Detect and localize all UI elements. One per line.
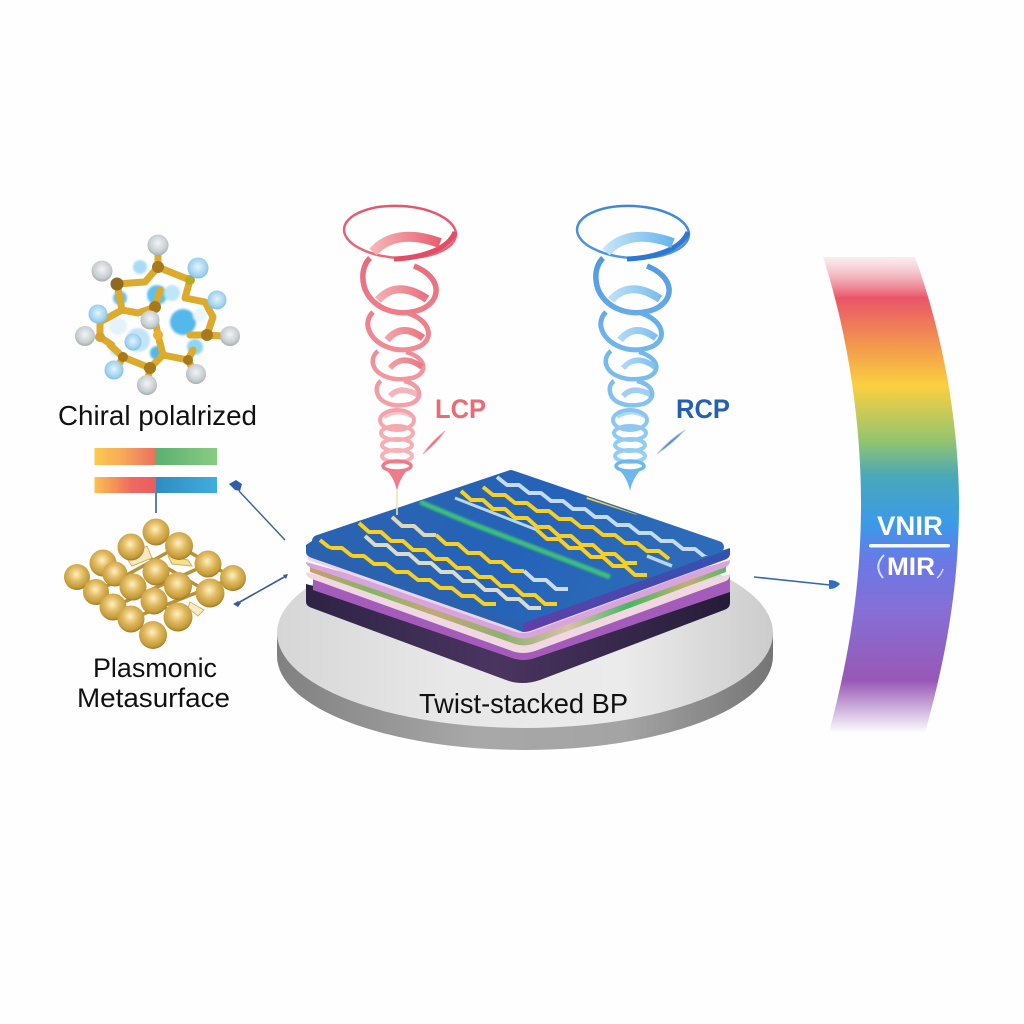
label: LCP: LCP	[435, 394, 486, 424]
label: Plasmonic Metasurface: Metasurface	[77, 683, 230, 713]
layer: rainbow film	[310, 562, 726, 646]
arrow: stack to bars	[229, 480, 285, 540]
molecule blue clusters	[109, 260, 207, 360]
disk top	[277, 538, 773, 728]
slab side left	[306, 541, 523, 632]
mixed wave yellow	[436, 535, 524, 571]
legend bar: bottom	[94, 477, 217, 493]
pointer: LCP tail	[423, 431, 445, 454]
green streak	[420, 502, 610, 577]
legend bar: top	[94, 448, 217, 465]
mixed wave white start	[392, 517, 436, 535]
layer: pale film	[308, 552, 728, 633]
label: Plasmonic Metasurface: Plasmonic	[93, 653, 217, 683]
molecule gold bonds	[100, 250, 222, 378]
connector: bar to metasurface	[155, 493, 157, 513]
yellow wave 4	[537, 530, 647, 575]
white wave 2	[497, 477, 717, 557]
label: Plasmonic Metasurface	[77, 653, 230, 713]
panel: substrate disk and stack	[277, 476, 773, 750]
yellow accent	[587, 497, 637, 513]
molecule outer atoms	[75, 234, 240, 395]
arrow: stack to metasurface	[233, 574, 288, 607]
rainbow arc	[823, 257, 959, 733]
label: VNIR: VNIR	[877, 511, 943, 541]
left parenthesis	[878, 555, 884, 578]
molecule dark joints	[95, 261, 213, 374]
panel: spectrum band	[823, 257, 959, 733]
layer: pink film	[306, 560, 730, 638]
heading: Chiral polalrized: Chiral polalrized	[58, 400, 257, 431]
wave pattern on slab	[320, 477, 717, 608]
icon: plasmonic metasurface	[64, 518, 246, 649]
label: RCP: RCP	[676, 394, 730, 424]
slab top face	[318, 476, 718, 617]
yellow wave 2	[359, 523, 557, 604]
metasurface connecting lattice	[77, 532, 233, 635]
layer: purple	[313, 575, 730, 660]
arrow: stack to spectrum	[754, 577, 840, 589]
infographic canvas	[59, 204, 959, 750]
slab side right	[523, 548, 730, 632]
yellow wave 5	[483, 487, 669, 559]
white accent	[647, 556, 672, 566]
label: MIR: MIR	[887, 553, 935, 581]
icon: RCP helix	[576, 203, 690, 491]
pointer: RCP tail	[657, 430, 685, 454]
mixed wave white end	[524, 571, 568, 589]
light beam from LCP tip	[396, 491, 398, 515]
icon: LCP helix	[343, 203, 457, 491]
metasurface gold spheres	[64, 518, 246, 649]
layer: dark base	[306, 584, 730, 683]
layer: pale pink lower	[306, 572, 730, 653]
fraction bar	[869, 544, 950, 548]
disk side	[277, 633, 773, 750]
yellow wave 1	[320, 540, 496, 604]
yellow wave 3	[461, 491, 637, 563]
icon: chiral molecule	[75, 234, 240, 395]
white wave 1	[365, 536, 541, 608]
right parenthesis	[937, 569, 943, 578]
pale streak	[455, 498, 537, 530]
label: Twist-stacked BP: Twist-stacked BP	[419, 688, 628, 719]
